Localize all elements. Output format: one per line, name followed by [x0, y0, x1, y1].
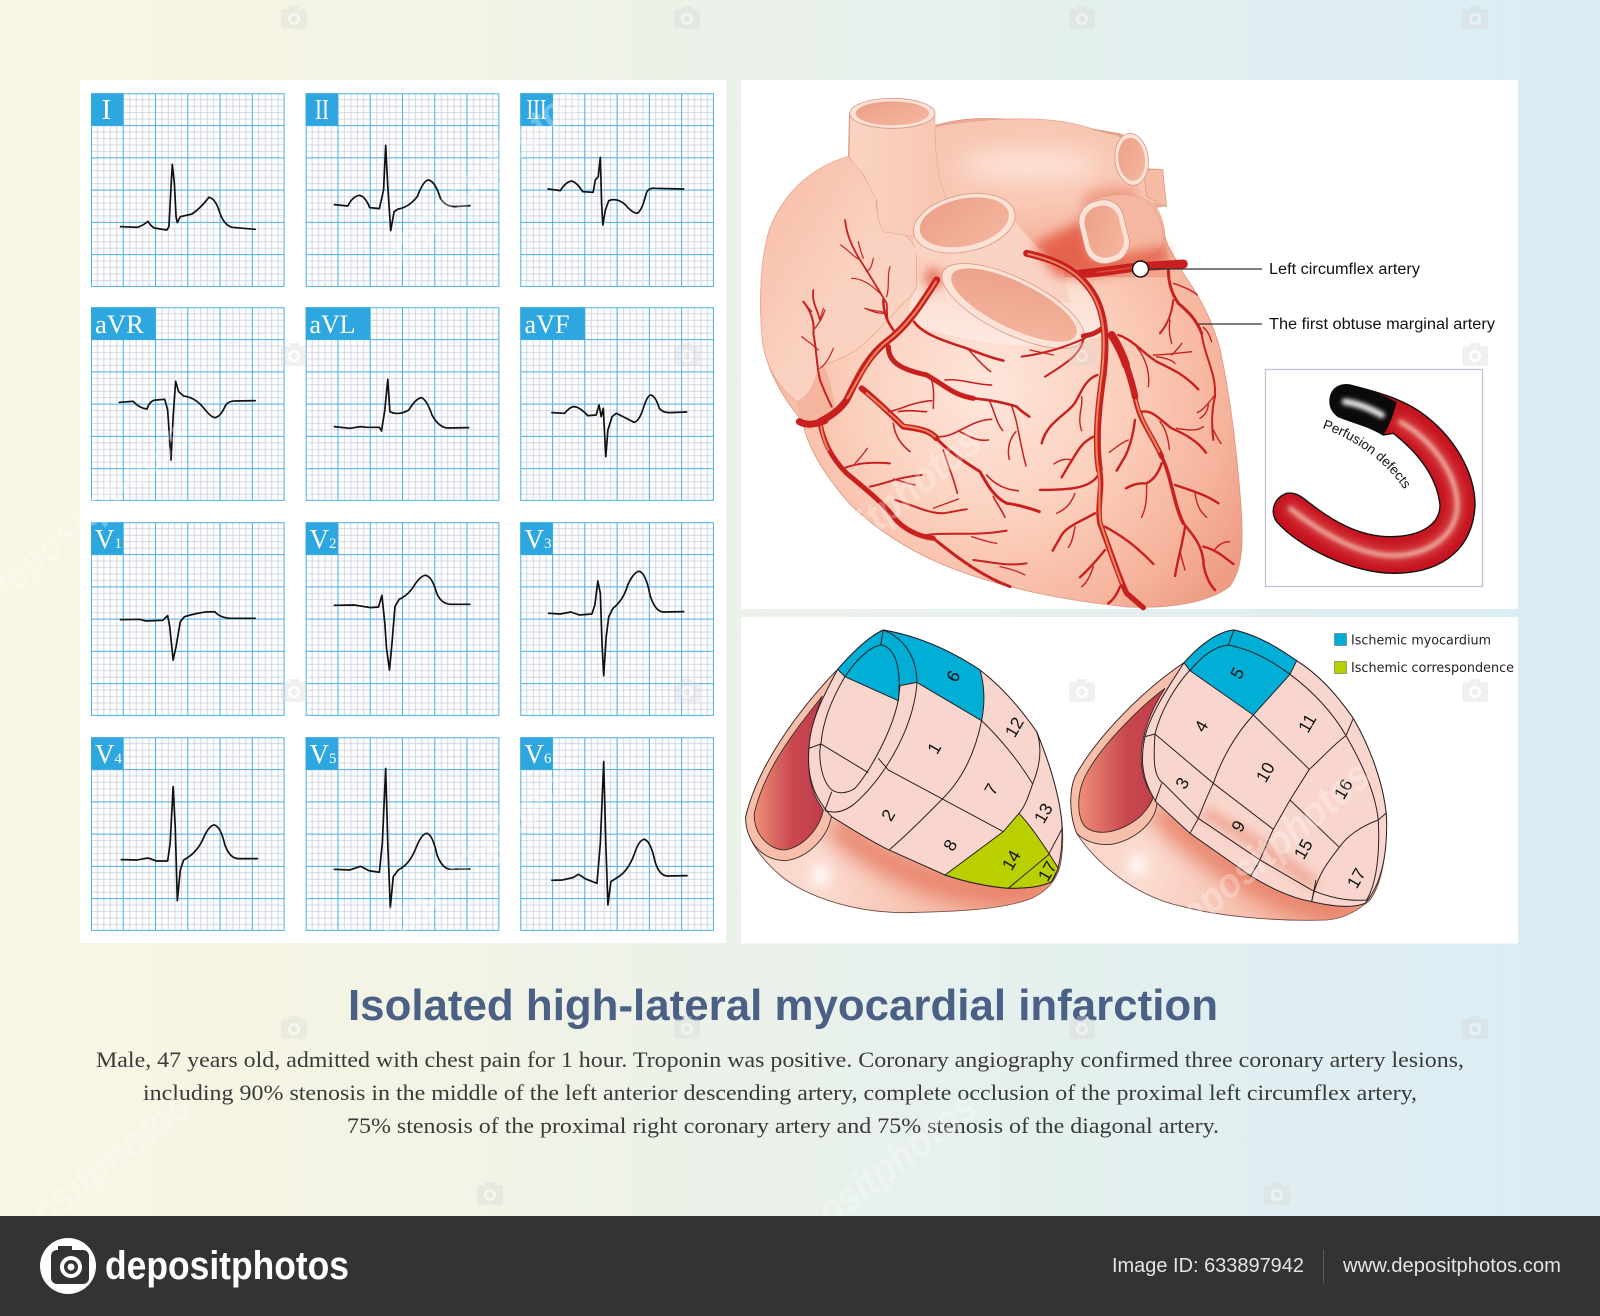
ECG lead I: I	[102, 94, 111, 126]
footer bar	[0, 1216, 1600, 1316]
case description text	[96, 1047, 1464, 1138]
segment numbers: 4	[1190, 717, 1212, 735]
ECG lead V4	[91, 737, 285, 931]
segment numbers: 16	[1330, 776, 1357, 803]
text: depositphotos	[368, 74, 591, 277]
ECG lead V3: V3	[524, 524, 552, 554]
legend	[1334, 632, 1514, 676]
segment numbers: 7	[980, 780, 1002, 798]
panel: ECG leads	[80, 80, 726, 943]
ECG lead aVL	[306, 307, 499, 501]
ECG lead I	[91, 93, 285, 287]
ECG lead V5: V5	[310, 739, 336, 769]
heart body	[761, 98, 1242, 607]
ECG lead V2: V2	[310, 524, 336, 554]
ECG lead aVL: aVL	[310, 310, 356, 339]
left coronary: LAD, LCx, diagonal, obtuse marginal	[1027, 253, 1233, 608]
segment numbers: 11	[1294, 710, 1320, 736]
text: depositphotos	[368, 748, 591, 951]
title: Isolated high-lateral myocardial infarction	[348, 981, 1218, 1030]
legend: Ischemic myocardium	[1351, 632, 1491, 648]
ECG lead V4: V4	[95, 739, 122, 769]
segment numbers: 13	[1030, 800, 1057, 827]
panel: 17-segment ventricle models	[741, 617, 1518, 944]
segment numbers: 8	[939, 836, 961, 854]
ventricle model left	[746, 630, 1063, 913]
label: perfusion defects: Perfusion defects	[1323, 420, 1409, 488]
ECG lead aVF	[520, 307, 714, 501]
case description text: Male, 47 years old, admitted with chest pain for 1 hour. Troponin was positive. Coronary angiography confirmed three coronary artery lesions,	[96, 1047, 1464, 1072]
ECG lead V3	[520, 522, 714, 716]
case description text: 75% stenosis of the proximal right coronary artery and 75% stenosis of the diagonal artery.	[347, 1113, 1219, 1138]
segment numbers: 15	[1290, 836, 1317, 863]
segment numbers: 17	[1343, 865, 1370, 892]
segment numbers	[877, 664, 1370, 892]
ECG lead V2	[306, 522, 499, 716]
ECG lead III: III	[526, 94, 546, 126]
text: depositphotos	[762, 417, 990, 614]
ECG lead V6: V6	[524, 739, 552, 769]
callout: first obtuse marginal artery: The first obtuse marginal artery	[1269, 316, 1495, 333]
inset: perfusion defect ring	[1264, 368, 1484, 588]
icon: camera logo	[40, 1238, 96, 1294]
segment numbers: 12	[1001, 714, 1028, 741]
ECG lead V1	[91, 522, 285, 716]
image ID: Image ID: 633897942	[1112, 1255, 1304, 1277]
ECG lead III	[520, 93, 714, 287]
ECG lead II	[306, 93, 499, 287]
segment numbers: 9	[1227, 817, 1249, 835]
ECG lead V5	[306, 737, 499, 931]
ring: perfused myocardium	[1273, 385, 1475, 573]
ECG lead aVR	[91, 307, 285, 501]
website: www.depositphotos.com	[1342, 1255, 1561, 1277]
coronary arteries	[799, 220, 1233, 608]
ECG lead aVR: aVR	[95, 310, 145, 339]
segment numbers: 5	[1226, 664, 1248, 682]
segment numbers: 2	[877, 806, 899, 824]
text: depositphotos	[1155, 68, 1384, 262]
right coronary and posterior branches	[799, 280, 1085, 587]
legend: Ischemic correspondence	[1351, 660, 1514, 676]
atrial branches	[803, 220, 890, 320]
segment numbers: 6	[942, 667, 964, 685]
callout: left circumflex artery: Left circumflex artery	[1269, 261, 1420, 278]
ECG lead V1: V1	[95, 524, 122, 554]
ECG lead V6	[520, 737, 714, 931]
text: depositphotos	[1154, 751, 1379, 951]
ECG lead aVF: aVF	[524, 310, 570, 339]
panel: heart	[741, 80, 1518, 610]
ring: black infarct cap	[1330, 385, 1397, 435]
segment numbers: 10	[1252, 758, 1279, 786]
ventricle model right	[1071, 630, 1387, 920]
segment numbers: 3	[1171, 774, 1193, 792]
text: depositphotos	[756, 1082, 985, 1276]
segment numbers: 14	[998, 846, 1025, 874]
brand name: depositphotos	[105, 1244, 349, 1288]
ECG lead II: II	[315, 94, 329, 126]
case description text: including 90% stenosis in the middle of the left anterior descending artery, complete occlusion of the proximal left circumflex artery,	[143, 1080, 1417, 1105]
segment numbers: 17	[1034, 858, 1061, 885]
segment numbers: 1	[923, 739, 945, 757]
callout: left circumflex artery	[1132, 261, 1420, 278]
